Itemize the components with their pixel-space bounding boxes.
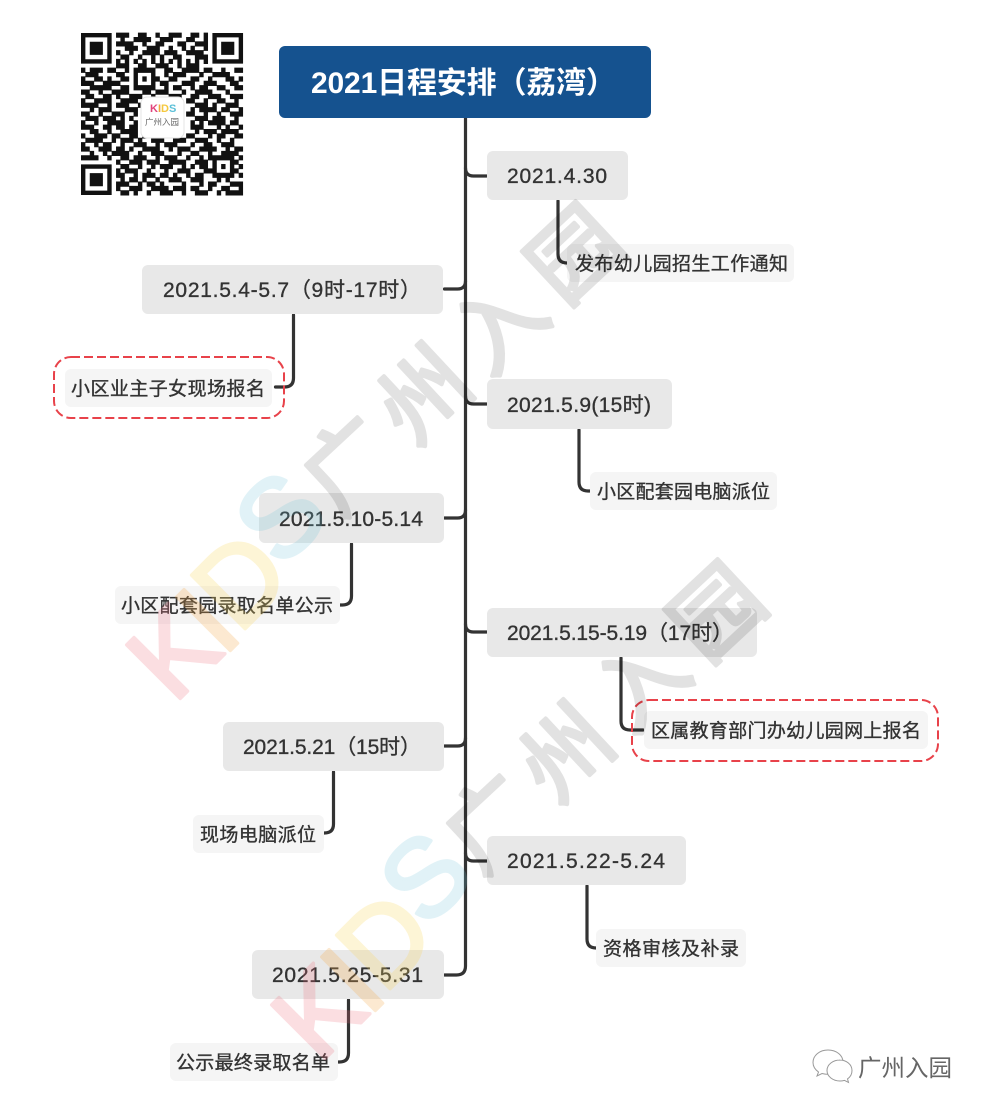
- watermark: upper KIDS: D: [169, 509, 312, 652]
- node: 2021.4.30: 2021.4.30: [507, 165, 607, 188]
- sub-node: 公示最终录取名单: [170, 1043, 338, 1081]
- sub-node: 资格审核及补录: [596, 929, 746, 967]
- watermark: lower KIDS: D: [314, 869, 457, 1012]
- sub-node: 小区配套园录取名单公示: [115, 586, 340, 624]
- node: 2021.5.25-5.31: [252, 950, 444, 999]
- watermark: upper 广州入园: 广州入园: [283, 178, 652, 532]
- sub-node: 现场电脑派位: [193, 815, 324, 853]
- dashed highlight: 区属教育部门办幼儿园网上报名: [632, 700, 938, 761]
- dashed highlight: 小区业主子女现场报名: [54, 357, 284, 418]
- QR logo: [141, 97, 184, 138]
- sub-node: 小区配套园录取名单公示: 小区配套园录取名单公示: [121, 595, 333, 617]
- node: 2021.5.15-5.19: [487, 608, 757, 657]
- dashed highlight: 区属教育部门办幼儿园网上报名: 区属教育部门办幼儿园网上报名: [651, 720, 921, 742]
- watermark: upper KIDS: S: [211, 448, 350, 587]
- timeline connector lines: [276, 118, 643, 1062]
- watermark: lower 广州入园: 广州入园: [425, 536, 794, 890]
- node: 2021.5.10-5.14: [259, 493, 444, 543]
- watermark: lower KIDS: K: [249, 943, 388, 1082]
- QR logo: 广州入园: [145, 117, 179, 127]
- node: 2021.5.22-5.24: [487, 836, 686, 885]
- sub-node: 资格审核及补录: 资格审核及补录: [603, 938, 739, 960]
- watermark: lower KIDS: I: [298, 926, 407, 1035]
- QR logo: KIDS: [150, 103, 176, 115]
- watermark: upper KIDS: [104, 448, 350, 722]
- node: 2021.5.22-5.24: 2021.5.22-5.24: [507, 850, 665, 873]
- watermark: upper KIDS: K: [104, 583, 243, 722]
- node: 2021.5.10-5.14: 2021.5.10-5.14: [279, 508, 423, 531]
- node: 2021.5.15-5.19: 2021.5.15-5.19（17时）: [507, 622, 733, 645]
- node: 2021.5.9: 2021.5.9(15时): [507, 394, 651, 417]
- QR code: [81, 33, 243, 196]
- footer account name: 广州入园: [858, 1055, 952, 1081]
- node: 2021.4.30: [487, 151, 628, 200]
- sub-node: 现场电脑派位: 现场电脑派位: [200, 824, 316, 846]
- node: 2021.5.9: [487, 379, 672, 429]
- watermark: lower KIDS: S: [356, 808, 495, 947]
- watermark: upper KIDS: I: [153, 566, 262, 675]
- watermark: lower KIDS: [249, 808, 495, 1082]
- node: 2021.5.25-5.31: 2021.5.25-5.31: [272, 964, 423, 987]
- node: 2021.5.4-5.7: 2021.5.4-5.7（9时-17时）: [163, 279, 421, 302]
- title box: [279, 46, 651, 118]
- node: 2021.5.21: 2021.5.21（15时）: [243, 736, 421, 759]
- title box: 2021日程安排（荔湾）: [311, 66, 616, 100]
- sub-node: 小区配套园电脑派位: 小区配套园电脑派位: [597, 481, 770, 503]
- sub-node: 发布幼儿园招生工作通知: [567, 244, 794, 282]
- dashed highlight: 小区业主子女现场报名: 小区业主子女现场报名: [71, 378, 265, 400]
- sub-node: 发布幼儿园招生工作通知: 发布幼儿园招生工作通知: [575, 253, 788, 275]
- sub-node: 小区配套园电脑派位: [590, 472, 777, 510]
- icon: WeChat bubbles: [813, 1050, 852, 1082]
- node: 2021.5.4-5.7: [142, 265, 443, 314]
- node: 2021.5.21: [223, 722, 444, 771]
- sub-node: 公示最终录取名单: 公示最终录取名单: [176, 1052, 330, 1074]
